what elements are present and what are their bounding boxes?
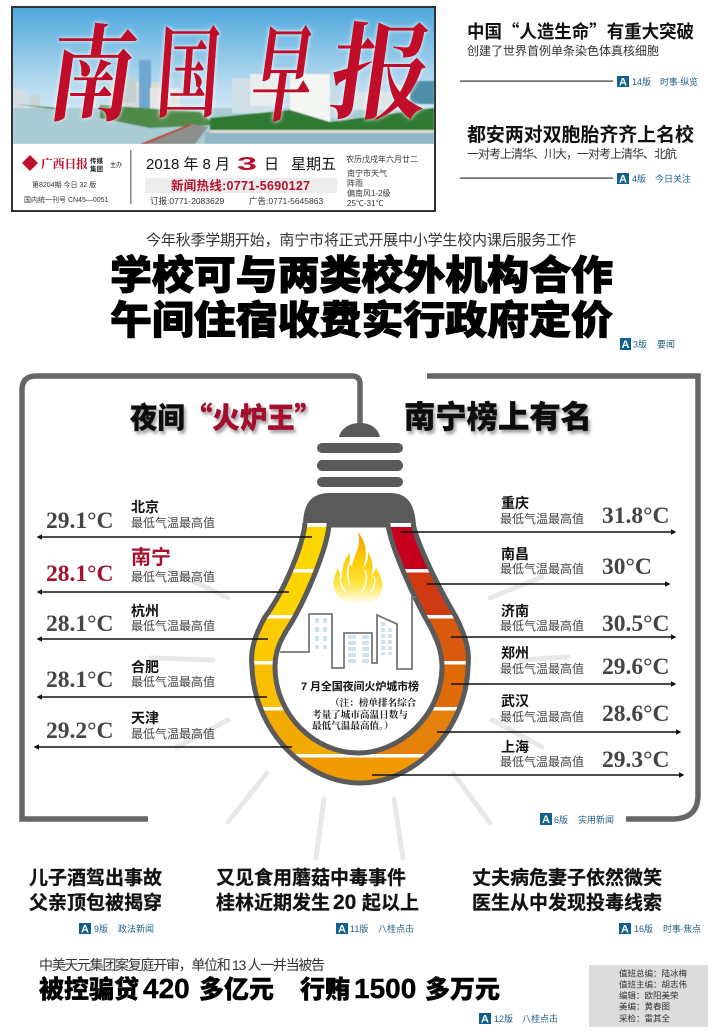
date line: 3	[237, 154, 257, 174]
page tag A6: 实用新闻	[578, 814, 614, 825]
icon: city skyline	[280, 597, 416, 669]
story: loan fraud: 中美天元集团案复庭开审，单位和 13 人一并当被告	[39, 957, 325, 973]
city: Chongqing: 最低气温最高值	[500, 511, 584, 526]
page tag A3: 要闻	[657, 340, 675, 350]
publisher block: 国内统一刊号 CN45—0051	[24, 195, 109, 204]
page tag A11: A	[338, 924, 346, 936]
weather: 25℃-31℃	[347, 199, 383, 208]
page tag A3: A	[622, 339, 630, 351]
hotline	[145, 178, 337, 193]
story: loan fraud: 1500	[354, 973, 416, 1004]
story: husband poisoned: 医生从中发现投毒线索	[472, 891, 662, 914]
city: Nanchang: 30°C	[602, 554, 652, 580]
left city list	[35, 499, 312, 747]
right city list	[372, 495, 683, 775]
light bulb	[240, 423, 480, 790]
story: loan fraud: 被控骗贷	[39, 975, 139, 1004]
city: Chongqing: 31.8°C	[602, 503, 670, 529]
city: Shanghai	[372, 739, 683, 775]
date line: 星期五	[291, 156, 336, 173]
story: mushroom poisoning: 桂林近期发生	[216, 891, 330, 914]
city: Nanning: 28.1°C	[46, 561, 114, 587]
city: Jinan	[451, 603, 675, 637]
page tag A12: 12版	[494, 1013, 513, 1024]
main headline: 今年秋季学期开始，南宁市将正式开展中小学生校内课后服务工作	[146, 232, 576, 249]
city: Shanghai: 最低气温最高值	[500, 754, 584, 769]
page tag A14	[617, 76, 698, 88]
publisher block: 传媒	[90, 156, 104, 165]
city: Wuhan	[437, 693, 680, 732]
city: Shanghai: 上海	[501, 739, 529, 755]
story: husband poisoned	[472, 866, 701, 936]
bulb note: 考量了城市高温日数与	[312, 707, 408, 721]
city: Tianjin: 最低气温最高值	[131, 726, 215, 741]
top story: artificial life: 创建了世界首例单条染色体真核细胞	[467, 43, 659, 58]
story: loan fraud	[39, 957, 558, 1026]
bulb note	[312, 695, 417, 732]
page tag A12: A	[481, 1014, 489, 1026]
city: Jinan: 最低气温最高值	[500, 618, 584, 633]
top story: twins	[460, 123, 694, 186]
city: Beijing	[38, 499, 312, 537]
city: Shanghai: 29.3°C	[602, 747, 670, 773]
city: Wuhan: 最低气温最高值	[500, 709, 584, 724]
city: Nanning: 最低气温最高值	[131, 569, 215, 584]
page tag A4: 今日关注	[655, 173, 691, 184]
city: Jinan: 30.5°C	[602, 611, 670, 637]
city: Beijing: 29.1°C	[46, 508, 114, 534]
story: drunk driving: 父亲顶包被揭穿	[29, 891, 162, 914]
page tag A12	[479, 1013, 558, 1026]
bulb cap	[303, 423, 416, 526]
heading left: 夜间“火炉王”	[130, 395, 322, 437]
page tag A14: 时事·纵览	[660, 76, 698, 87]
city: Wuhan: 武汉	[501, 693, 529, 709]
city: Hefei: 最低气温最高值	[131, 674, 215, 689]
top story: twins: 都安两对双胞胎齐齐上名校	[467, 123, 694, 146]
light rays	[150, 570, 568, 858]
story: loan fraud: 多万元	[425, 976, 500, 1004]
subscription phones: 广告:0771-5645863	[249, 196, 323, 206]
city: Beijing: 最低气温最高值	[131, 515, 215, 530]
city: Hangzhou: 杭州	[131, 603, 159, 619]
city: Zhengzhou: 29.6°C	[602, 654, 670, 680]
masthead city photo	[13, 8, 434, 144]
editors box: 值班总编：陆冰梅	[619, 968, 688, 978]
city: Beijing: 北京	[131, 499, 159, 515]
page tag A16: 时事·焦点	[663, 923, 701, 934]
story: loan fraud: 420	[143, 973, 190, 1004]
city: Nanning	[38, 545, 289, 592]
city: Tianjin: 天津	[131, 710, 159, 726]
city: Tianjin: 29.2°C	[46, 718, 114, 744]
city: Chongqing	[400, 495, 675, 532]
weather: 农历戊戌年六月廿二	[346, 154, 418, 164]
hotline: 新闻热线:0771-5690127	[171, 178, 310, 193]
date line: 2018 年 8 月	[146, 156, 230, 173]
publisher block: 主办	[110, 161, 122, 169]
masthead	[12, 0, 443, 211]
page tag A3: 3版	[633, 338, 647, 350]
city: Hefei: 28.1°C	[46, 667, 114, 693]
weather: 偏南风1-2级	[347, 188, 391, 198]
page tag A3	[620, 338, 675, 351]
page tag A6	[540, 813, 614, 826]
city: Hangzhou: 最低气温最高值	[131, 618, 215, 633]
city: Tianjin	[35, 710, 292, 747]
publisher block	[22, 155, 122, 204]
page tag A16: A	[621, 924, 629, 936]
story: mushroom poisoning: 起以上	[362, 892, 419, 914]
editors box: 美编：黄春图	[619, 1002, 670, 1012]
weather	[346, 154, 418, 208]
publisher block: 集团	[90, 164, 104, 173]
editors box: 值班主编：胡志伟	[619, 980, 688, 990]
top story: artificial life: 中国“人造生命”有重大突破	[467, 18, 694, 44]
city: Nanchang: 最低气温最高值	[500, 561, 584, 576]
page tag A9: 政法新闻	[118, 923, 154, 934]
city: Nanchang: 南昌	[501, 546, 529, 562]
city: Hangzhou	[38, 603, 268, 639]
city: Hefei: 合肥	[131, 659, 159, 675]
city: Zhengzhou	[451, 645, 675, 684]
icon: flame	[334, 532, 382, 604]
page tag A16	[619, 923, 701, 936]
story: loan fraud: 行贿	[300, 976, 350, 1004]
bulb note: （注：榜单排名综合	[330, 695, 417, 709]
page tag A4: 4版	[632, 173, 646, 184]
page tag A4: A	[619, 174, 627, 186]
weather: 南宁市天气	[347, 168, 387, 178]
page tag A9: A	[81, 924, 89, 936]
story: drunk driving	[29, 867, 162, 936]
page tag A14: A	[619, 76, 627, 88]
main headline: 午间住宿收费实行政府定价	[110, 298, 613, 343]
city: Nanning: 南宁	[131, 545, 171, 569]
main headline: 学校可与两类校外机构合作	[110, 253, 613, 298]
story: drunk driving: 儿子酒驾出事故	[29, 867, 162, 889]
city: Zhengzhou: 最低气温最高值	[500, 661, 584, 676]
date line: 日	[264, 156, 279, 173]
page tag A11	[336, 923, 414, 936]
city: Chongqing: 重庆	[501, 495, 529, 511]
bulb note: 最低气温最高值。）	[312, 718, 394, 732]
city: Jinan: 济南	[501, 603, 529, 619]
city: Wuhan: 28.6°C	[602, 701, 670, 727]
page tag A14: 14版	[632, 76, 651, 87]
heat band segments	[254, 523, 466, 780]
page tag A6: 6版	[554, 814, 568, 825]
story: mushroom poisoning: 又见食用蘑菇中毒事件	[216, 866, 406, 889]
editors box: 采检：雷其全	[619, 1014, 671, 1024]
panel: hot nights infographic	[22, 376, 698, 858]
city: Hefei	[38, 659, 267, 697]
story: mushroom poisoning	[216, 866, 419, 936]
bulb caption: 7 月全国夜间火炉城市榜	[301, 679, 419, 693]
weather: 阵雨	[347, 178, 363, 188]
city: Hangzhou: 28.1°C	[46, 611, 114, 637]
editors box	[589, 965, 708, 1027]
top story: twins: 一对考上清华、川大，一对考上清华、北航	[467, 146, 677, 161]
subscription phones	[150, 196, 323, 206]
page tag A9: 9版	[94, 923, 108, 934]
top story: artificial life	[460, 18, 698, 88]
subscription phones: 订报:0771-2083629	[150, 196, 224, 206]
page tag A11: 11版	[350, 923, 368, 934]
story: mushroom poisoning: 20	[333, 891, 356, 914]
page tag A11: 八桂点击	[378, 923, 414, 934]
page tag A6: A	[542, 814, 550, 826]
story: loan fraud: 多亿元	[199, 976, 274, 1004]
page tag A16: 16版	[634, 923, 653, 934]
frame	[22, 376, 698, 819]
story: husband poisoned: 丈夫病危妻子依然微笑	[472, 866, 662, 889]
date line	[146, 154, 336, 174]
page tag A4	[617, 173, 691, 186]
glass interior	[275, 525, 442, 753]
editors box: 编辑：欧阳美荣	[619, 990, 679, 1000]
publisher block: 广西日报	[41, 155, 88, 172]
masthead title	[41, 0, 443, 143]
city: Nanchang	[427, 546, 669, 584]
page tag A9	[79, 923, 154, 936]
heading right: 南宁榜上有名	[404, 400, 592, 435]
publisher block: 第8204期 今日 32 版	[32, 180, 96, 189]
city: Zhengzhou: 郑州	[501, 645, 529, 661]
main headline	[110, 232, 675, 351]
page tag A12: 八桂点击	[522, 1013, 558, 1024]
